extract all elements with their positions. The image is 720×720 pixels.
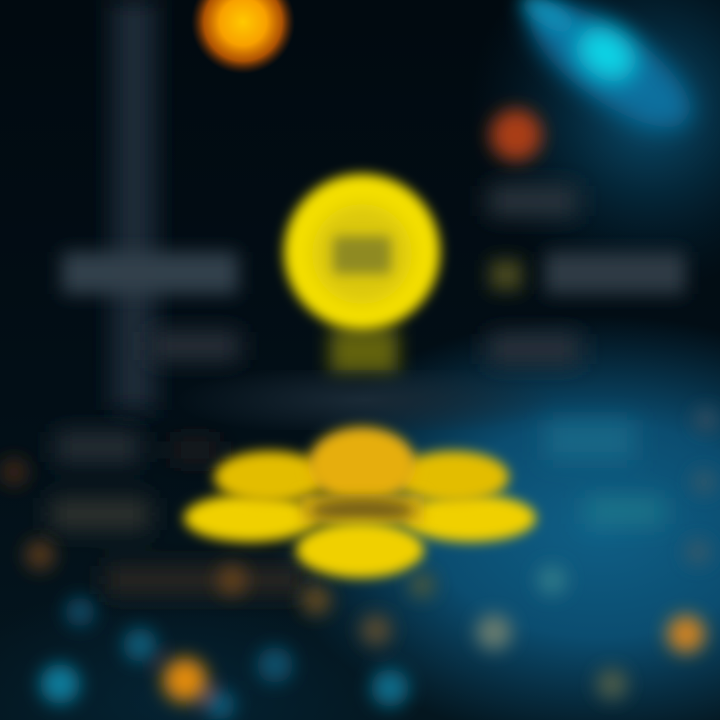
right panel text blobs	[545, 420, 665, 524]
shadow band	[175, 370, 555, 430]
vertical column	[112, 0, 156, 410]
coin: right upper	[397, 451, 509, 503]
coin: top	[308, 427, 416, 503]
left sub text	[150, 332, 240, 360]
orange light	[191, 0, 295, 74]
icon: coin disc	[284, 174, 440, 330]
left heading text	[62, 252, 238, 294]
right text block top	[488, 186, 578, 216]
red marker	[490, 109, 542, 161]
icon: coin stem	[330, 328, 398, 374]
coin: left upper	[214, 451, 326, 503]
small olive marker	[490, 260, 522, 290]
right sub text	[488, 334, 580, 364]
coin: center	[310, 498, 414, 522]
yellow coin pile	[175, 370, 555, 578]
icon: coin inner face	[312, 204, 412, 304]
coin: band under top	[300, 494, 424, 524]
cyan light	[512, 0, 708, 149]
coin: bottom	[296, 522, 424, 578]
lower left text blocks	[50, 432, 305, 594]
coin: right lower	[404, 494, 536, 542]
coin: left lower	[184, 494, 316, 542]
yellow coin icon	[284, 174, 440, 374]
right heading text	[545, 252, 685, 294]
icon: coin center	[333, 236, 391, 274]
glowing dots	[0, 408, 718, 720]
